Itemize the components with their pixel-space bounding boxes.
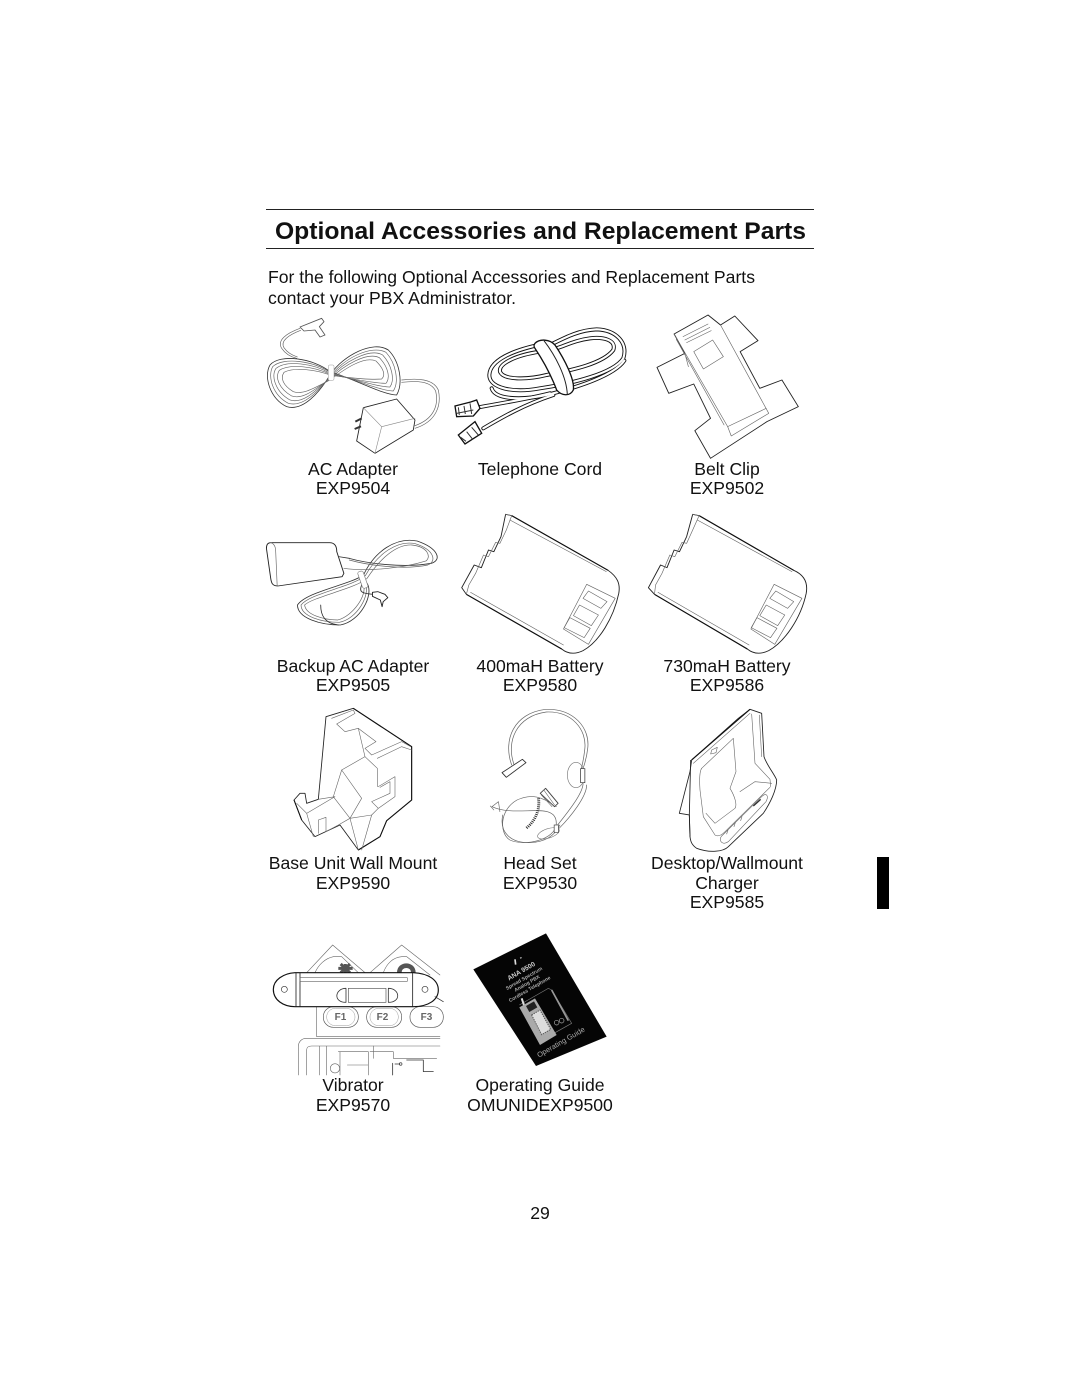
- intro text: [268, 267, 755, 308]
- caption: belt clip: [690, 459, 764, 498]
- icon: operating guide booklet: Operating Guide: [535, 1025, 586, 1060]
- caption: base unit wall mount: EXP9590: [316, 873, 390, 893]
- icon: vibrator: F2: [377, 1012, 389, 1023]
- intro text: contact your PBX Administrator.: [268, 288, 516, 308]
- caption: desktop/wallmount charger: EXP9585: [690, 892, 764, 912]
- icon: base unit wall mount: [294, 708, 412, 850]
- caption: vibrator: EXP9570: [316, 1095, 390, 1115]
- caption: base unit wall mount: Base Unit Wall Mount: [269, 853, 437, 873]
- caption: head set: EXP9530: [503, 873, 577, 893]
- icon: operating guide booklet: Analog PBX: [513, 974, 542, 994]
- caption: 730mAh battery: EXP9586: [690, 675, 764, 695]
- caption: head set: Head Set: [503, 853, 577, 873]
- caption: desktop/wallmount charger: Charger: [695, 873, 759, 893]
- icon: operating guide booklet: [473, 933, 607, 1066]
- intro text: For the following Optional Accessories and Replacement Parts: [268, 267, 755, 287]
- caption: 400mAh battery: 400maH Battery: [476, 656, 604, 676]
- icon: backup AC adapter: [266, 540, 437, 625]
- caption: AC adapter: AC Adapter: [308, 459, 398, 479]
- caption: telephone cord: Telephone Cord: [478, 459, 602, 479]
- caption: 400mAh battery: EXP9580: [503, 675, 577, 695]
- caption: desktop/wallmount charger: Desktop/Wallmount: [651, 853, 803, 873]
- icon: operating guide booklet: Cordless Telephone: [508, 975, 552, 1004]
- icon: 400mAh battery: [462, 514, 619, 653]
- icon: telephone cord: [455, 329, 624, 444]
- caption: backup AC adapter: Backup AC Adapter: [277, 656, 429, 676]
- section tab marker: [877, 857, 889, 909]
- icon: 730mAh battery: [648, 514, 807, 653]
- caption: vibrator: [316, 1075, 390, 1115]
- icon: operating guide booklet: ANA 9500: [506, 961, 537, 982]
- caption: AC adapter: [308, 459, 398, 498]
- icon: desktop/wallmount charger: [679, 709, 777, 851]
- caption: operating guide: [467, 1075, 613, 1115]
- caption: desktop/wallmount charger: [651, 853, 803, 912]
- caption: 730mAh battery: 730maH Battery: [663, 656, 791, 676]
- caption: head set: [503, 853, 577, 893]
- title with rules: Optional Accessories and Replacement Parts: [275, 218, 806, 245]
- caption: 400mAh battery: [476, 656, 604, 695]
- caption: operating guide: OMUNIDEXP9500: [467, 1095, 613, 1115]
- caption: belt clip: Belt Clip: [694, 459, 760, 479]
- icon: operating guide booklet: Spread Spectrum: [505, 966, 544, 992]
- icon: AC adapter: [267, 318, 439, 453]
- caption: operating guide: Operating Guide: [475, 1075, 605, 1095]
- caption: vibrator: Vibrator: [322, 1075, 384, 1095]
- icon: vibrator: F3: [421, 1012, 433, 1023]
- caption: base unit wall mount: [269, 853, 437, 893]
- icon: belt clip: [657, 315, 798, 458]
- icon: vibrator: F1: [335, 1012, 347, 1023]
- page number: 29: [530, 1203, 550, 1223]
- caption: 730mAh battery: [663, 656, 791, 695]
- icon: head set: [490, 709, 588, 843]
- caption: AC adapter: EXP9504: [316, 478, 390, 498]
- caption: belt clip: EXP9502: [690, 478, 764, 498]
- icon: vibrator: [273, 945, 443, 1075]
- caption: backup AC adapter: EXP9505: [316, 675, 390, 695]
- caption: backup AC adapter: [277, 656, 429, 695]
